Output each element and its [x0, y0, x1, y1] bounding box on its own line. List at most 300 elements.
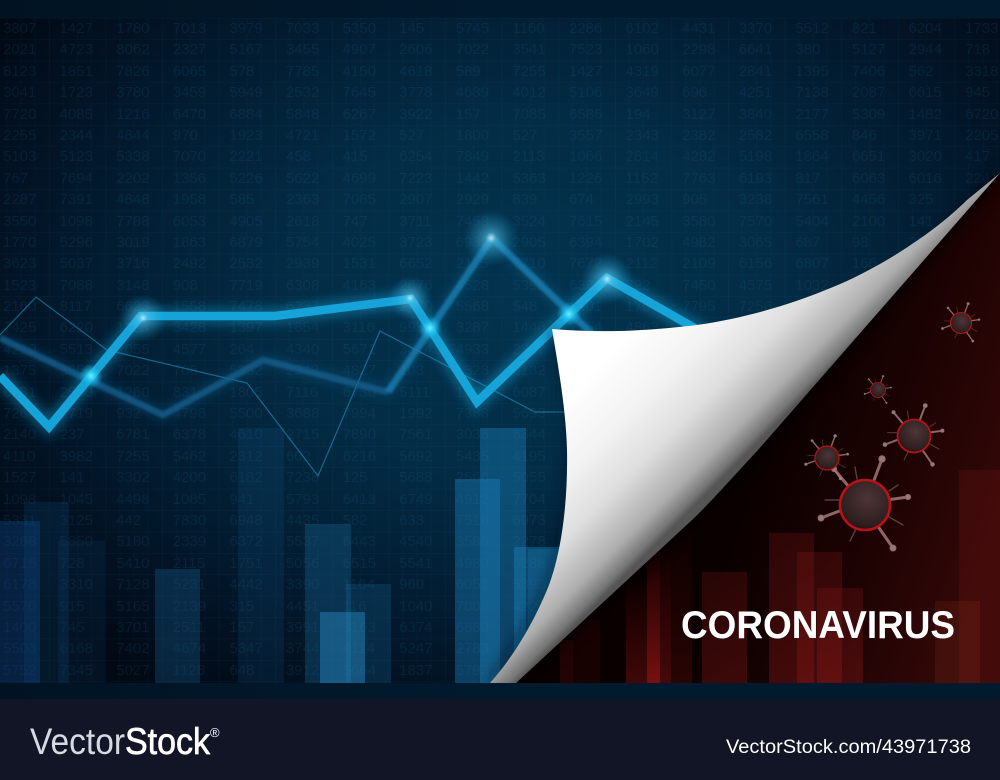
faint table of numbers: 5693 [512, 405, 546, 422]
faint table of numbers: 6879 [229, 234, 263, 251]
faint table of numbers: 3711 [399, 213, 431, 230]
faint table of numbers: 1205 [456, 384, 489, 401]
faint table of numbers: 1837 [399, 662, 433, 679]
faint table of numbers: 1864 [795, 148, 829, 165]
faint table of numbers: 4540 [399, 533, 433, 550]
faint table of numbers: 1531 [343, 255, 376, 272]
faint table of numbers: 722 [626, 277, 651, 294]
faint table of numbers: 2719 [60, 405, 93, 422]
faint table of numbers: 5350 [343, 20, 376, 37]
faint table of numbers: 2286 [569, 20, 602, 37]
faint table of numbers: 2115 [456, 255, 488, 272]
faint table of numbers: 6443 [343, 533, 376, 550]
faint table of numbers: 4689 [456, 84, 489, 101]
faint table of numbers: 6204 [908, 20, 942, 37]
faint table of numbers: 582 [343, 512, 368, 529]
faint table of numbers: 3302 [116, 469, 150, 486]
faint table of numbers: 6308 [286, 277, 319, 294]
faint table of numbers: 1085 [173, 491, 206, 508]
faint table of numbers: 5055 [512, 469, 546, 486]
faint table of numbers: 6372 [229, 533, 263, 550]
faint table of numbers: 5850 [60, 533, 93, 550]
faint table of numbers: 2993 [626, 191, 659, 208]
faint table of numbers: 5562 [965, 213, 998, 230]
faint table of numbers: 3238 [739, 191, 772, 208]
faint table of numbers: 2278 [512, 533, 546, 550]
faint table of numbers: 7425 [3, 319, 36, 336]
faint table of numbers: 6615 [908, 84, 942, 101]
faint table of numbers: 7402 [116, 640, 150, 657]
faint table of numbers: 5332 [229, 362, 263, 379]
faint table of numbers: 2715 [286, 426, 319, 443]
faint table of numbers: 2344 [60, 127, 93, 144]
faint table of numbers: 3163 [343, 619, 376, 636]
faint table of numbers: 7785 [286, 63, 319, 80]
faint table of numbers: 6641 [739, 41, 772, 58]
faint table of numbers: 5226 [229, 170, 263, 187]
faint table of numbers: 3557 [569, 127, 602, 144]
faint table of numbers: 7849 [456, 148, 489, 165]
faint table of numbers: 821 [852, 20, 877, 37]
faint table of numbers: 941 [229, 491, 254, 508]
faint table of numbers: 1751 [229, 555, 263, 572]
faint table of numbers: 1032 [795, 277, 829, 294]
faint table of numbers: 7795 [682, 298, 716, 315]
faint table of numbers: 3716 [116, 255, 150, 272]
faint table of numbers: 7388 [456, 405, 489, 422]
faint table of numbers: 1958 [173, 191, 206, 208]
faint table of numbers: 6220 [60, 319, 93, 336]
faint table of numbers: 1066 [569, 148, 602, 165]
faint table of numbers: 6087 [512, 384, 546, 401]
faint table of numbers: 417 [965, 148, 990, 165]
faint table of numbers: 170 [626, 298, 651, 315]
main glowing line [0, 278, 705, 427]
faint table of numbers: 5671 [343, 341, 376, 358]
faint table of numbers: 3991 [286, 619, 319, 636]
faint table of numbers: 6053 [173, 213, 206, 230]
faint table of numbers: 915 [60, 598, 85, 615]
faint table of numbers: 2307 [512, 341, 546, 358]
faint table of numbers: 2204 [908, 234, 942, 251]
faint table of numbers: 1733 [965, 20, 998, 37]
faint table of numbers: 2177 [795, 106, 829, 123]
faint table of numbers: 4435 [286, 512, 319, 529]
faint table of numbers: 5106 [569, 84, 602, 101]
faint table of numbers: 103 [399, 362, 424, 379]
faint table of numbers: 4528 [456, 277, 489, 294]
faint table of numbers: 6932 [456, 234, 489, 251]
faint table of numbers: 3903 [512, 640, 546, 657]
faint table of numbers: 6948 [229, 512, 263, 529]
faint table of numbers: 3116 [343, 319, 375, 336]
faint table of numbers: 3840 [739, 106, 772, 123]
icon: large virus [818, 456, 911, 551]
faint table of numbers: 7345 [60, 662, 93, 679]
faint table of numbers: 5462 [173, 448, 206, 465]
faint table of numbers: 2511 [173, 619, 205, 636]
faint table of numbers: 1863 [173, 234, 206, 251]
faint table of numbers: 1427 [60, 20, 93, 37]
faint table of numbers: 4210 [3, 341, 36, 358]
faint table of numbers: 7116 [286, 384, 318, 401]
faint table of numbers: 945 [965, 84, 990, 101]
faint table of numbers: 3912 [286, 662, 319, 679]
faint table of numbers: 4905 [229, 213, 263, 230]
faint table of numbers: 1201 [569, 298, 602, 315]
faint table of numbers: 5435 [456, 448, 489, 465]
faint table of numbers: 1923 [229, 127, 263, 144]
faint table of numbers: 1723 [60, 84, 93, 101]
title: coronavirus: CORONAVIRUS [681, 604, 955, 647]
faint table of numbers: 2532 [229, 255, 263, 272]
faint table of numbers: 6102 [626, 20, 659, 37]
faint table of numbers: 2298 [682, 41, 716, 58]
faint table of numbers: 3586 [456, 533, 489, 550]
faint table of numbers: 4912 [456, 491, 489, 508]
faint table of numbers: 8062 [116, 41, 150, 58]
faint table of numbers: 2112 [626, 255, 658, 272]
faint table of numbers: 831 [173, 384, 198, 401]
faint table of numbers: 98 [852, 234, 869, 251]
faint table of numbers: 7085 [343, 191, 376, 208]
faint table of numbers: 1098 [3, 491, 36, 508]
faint table of numbers: 458 [286, 148, 311, 165]
faint table of numbers: 2339 [173, 533, 206, 550]
faint table of numbers: 5347 [229, 640, 263, 657]
faint table of numbers: 1123 [116, 319, 148, 336]
faint table of numbers: 5512 [795, 20, 829, 37]
faint table of numbers: 706 [173, 362, 198, 379]
faint table of numbers: 3455 [286, 41, 319, 58]
faint table of numbers: 3268 [3, 533, 36, 550]
faint table of numbers: 3524 [512, 213, 546, 230]
faint table of numbers: 6063 [852, 170, 885, 187]
faint table of numbers: 8117 [60, 298, 92, 315]
faint table of numbers: 5247 [399, 640, 433, 657]
faint table of numbers: 6880 [456, 619, 489, 636]
faint table of numbers: 2841 [739, 63, 772, 80]
faint table of numbers: 145 [399, 20, 424, 37]
faint table of numbers: 4610 [229, 426, 263, 443]
faint table of numbers: 2145 [626, 213, 659, 230]
faint table of numbers: 1395 [795, 63, 829, 80]
faint table of numbers: 4618 [399, 63, 433, 80]
faint table of numbers: 4721 [286, 127, 319, 144]
faint table of numbers: 4674 [173, 640, 206, 657]
faint table of numbers: 2343 [626, 127, 659, 144]
faint table of numbers: 7009 [456, 598, 489, 615]
faint table of numbers: 4980 [456, 555, 489, 572]
faint table of numbers: 7570 [739, 213, 772, 230]
faint table of numbers: 6374 [399, 619, 433, 636]
faint table of numbers: 4319 [626, 63, 659, 80]
faint table of numbers: 3814 [399, 341, 433, 358]
faint table of numbers: 3701 [116, 619, 150, 636]
faint table of numbers: 1128 [173, 662, 205, 679]
faint table of numbers: 1045 [60, 491, 93, 508]
faint table of numbers: 7033 [286, 20, 319, 37]
faint table of numbers: 2087 [852, 84, 885, 101]
faint table of numbers: 4012 [512, 84, 546, 101]
faint table of numbers: 7710 [512, 255, 546, 272]
faint table of numbers: 995 [399, 319, 424, 336]
faint table of numbers: 2382 [682, 127, 716, 144]
faint table of numbers: 1400 [3, 619, 36, 636]
faint table of numbers: 1216 [116, 106, 150, 123]
faint table of numbers: 1160 [512, 20, 545, 37]
faint table of numbers: 6394 [569, 234, 602, 251]
faint table of numbers: 4251 [739, 84, 772, 101]
faint table of numbers: 6288 [512, 555, 546, 572]
panel: red coronavirus section [516, 173, 1000, 683]
faint table of numbers: 1558 [173, 298, 206, 315]
faint table of numbers: 687 [795, 234, 820, 251]
faint table of numbers: 602 [286, 448, 311, 465]
faint table of numbers: 325 [908, 191, 934, 208]
red bar chart [560, 470, 1000, 683]
faint table of numbers: 6168 [60, 640, 93, 657]
faint table of numbers: 166 [852, 255, 877, 272]
faint table of numbers: 3688 [286, 405, 319, 422]
faint table of numbers: 5231 [173, 576, 206, 593]
image id caption: VectorStock.com/43971738 [726, 737, 971, 758]
faint table of numbers: 6178 [3, 576, 36, 593]
faint table of numbers: 7264 [3, 405, 36, 422]
faint table of numbers: 2241 [965, 170, 998, 187]
faint table of numbers: 6267 [343, 106, 376, 123]
faint table of numbers: 5393 [512, 576, 546, 593]
blue bar chart [0, 428, 574, 683]
faint table of numbers: 6081 [3, 384, 36, 401]
faint table of numbers: 3041 [3, 84, 36, 101]
faint table of numbers: 1226 [569, 170, 602, 187]
faint table of numbers: 4699 [343, 170, 376, 187]
faint table of numbers: 6237 [286, 298, 319, 315]
faint table of numbers: 4577 [173, 341, 206, 358]
faint table of numbers: 846 [852, 127, 877, 144]
faint table of numbers: 2109 [682, 255, 716, 272]
faint table of numbers: 2532 [286, 84, 319, 101]
faint table of numbers: 5331 [3, 512, 36, 529]
faint table of numbers: 5688 [399, 469, 433, 486]
faint table of numbers: 5167 [229, 41, 263, 58]
icon: small virus left [804, 434, 849, 480]
faint table of numbers: 7719 [229, 277, 263, 294]
faint table of numbers: 5570 [3, 598, 36, 615]
faint table of numbers: 3922 [399, 106, 433, 123]
faint table of numbers: 7022 [116, 362, 150, 379]
faint table of numbers: 2618 [286, 213, 319, 230]
faint table of numbers: 2470 [399, 298, 433, 315]
faint table of numbers: 1040 [399, 598, 433, 615]
faint table of numbers: 4456 [852, 191, 885, 208]
faint table of numbers: 7478 [229, 298, 263, 315]
faint table of numbers: 1482 [908, 106, 942, 123]
faint table of numbers: 2606 [399, 41, 433, 58]
faint table of numbers: 585 [229, 191, 254, 208]
faint table of numbers: 4451 [286, 598, 319, 615]
faint table of numbers: 7022 [456, 41, 489, 58]
faint table of numbers: 589 [456, 63, 481, 80]
faint table of numbers: 2205 [965, 127, 998, 144]
faint table of numbers: 1520 [512, 619, 546, 636]
faint table of numbers: 194 [626, 106, 651, 123]
faint table of numbers: 6216 [343, 448, 376, 465]
faint table of numbers: 5165 [116, 598, 150, 615]
faint table of numbers: 7013 [173, 20, 206, 37]
faint table of numbers: 5296 [60, 234, 93, 251]
faint table of numbers: 4848 [116, 191, 150, 208]
logo: VectorStock: Stock [125, 721, 210, 762]
faint table of numbers: 3428 [173, 319, 206, 336]
faint table of numbers: 7523 [569, 41, 602, 58]
secondary glowing line [0, 238, 620, 415]
faint table of numbers: 2814 [626, 148, 659, 165]
faint table of numbers: 5309 [852, 106, 885, 123]
faint table of numbers: 1523 [3, 277, 36, 294]
faint table of numbers: 2221 [229, 148, 263, 165]
faint table of numbers: 6182 [229, 469, 263, 486]
faint table of numbers: 1992 [399, 405, 433, 422]
faint table of numbers: 839 [512, 191, 537, 208]
faint table of numbers: 4025 [343, 234, 376, 251]
curled white page [490, 173, 1000, 683]
faint table of numbers: 5537 [286, 533, 319, 550]
faint table of numbers: 6077 [682, 63, 716, 80]
faint table of numbers: 8123 [3, 63, 36, 80]
faint table of numbers: 3744 [286, 640, 319, 657]
faint table of numbers: 4282 [682, 148, 716, 165]
icon: tiny virus [864, 375, 892, 404]
faint table of numbers: 1702 [626, 234, 659, 251]
faint table of numbers: 3649 [626, 84, 659, 101]
faint table of numbers: 6730 [343, 384, 376, 401]
faint table of numbers: 2115 [173, 555, 205, 572]
faint table of numbers: 6884 [229, 106, 263, 123]
logo: VectorStock: Vector [30, 721, 125, 762]
faint table of numbers: 4163 [343, 277, 376, 294]
faint table of numbers: 6651 [852, 148, 885, 165]
faint table of numbers: 5793 [456, 662, 489, 679]
faint table of numbers: 2566 [456, 469, 489, 486]
faint table of numbers: 7994 [343, 405, 376, 422]
faint table of numbers: 6254 [399, 148, 433, 165]
icon: medium virus [883, 404, 944, 466]
faint table of numbers: 3287 [456, 319, 489, 336]
faint table of numbers: 728 [60, 555, 85, 572]
faint table of numbers: 1427 [569, 63, 602, 80]
faint table of numbers: 1572 [343, 127, 376, 144]
faint table of numbers: 1800 [456, 127, 489, 144]
faint table of numbers: 6344 [512, 426, 546, 443]
faint table of numbers: 960 [399, 576, 424, 593]
faint table of numbers: 3459 [173, 84, 206, 101]
faint table of numbers: 2312 [229, 448, 263, 465]
faint table of numbers: 4863 [626, 319, 659, 336]
faint table of numbers: 5848 [286, 106, 319, 123]
faint table of numbers: 527 [512, 127, 537, 144]
faint table of numbers: 2287 [3, 191, 36, 208]
faint table of numbers: 696 [682, 84, 707, 101]
faint table of numbers: 1060 [626, 41, 659, 58]
faint table of numbers: 7826 [116, 63, 150, 80]
faint table of numbers: 3036 [456, 426, 489, 443]
curl shadow on blue area [490, 329, 570, 683]
faint table of numbers: 5745 [456, 20, 489, 37]
faint table of numbers: 932 [116, 405, 141, 422]
faint table of numbers: 6132 [512, 362, 546, 379]
faint table of numbers: 1442 [456, 170, 489, 187]
faint table of numbers: 1527 [3, 469, 36, 486]
faint table of numbers: 4827 [343, 362, 376, 379]
faint table of numbers: 5404 [795, 213, 829, 230]
faint table of numbers: 2160 [3, 298, 36, 315]
faint table of numbers: 905 [682, 191, 707, 208]
faint table of numbers: 2560 [60, 384, 93, 401]
faint table of numbers: 7406 [852, 63, 885, 80]
faint table of numbers: 7890 [343, 426, 376, 443]
faint table of numbers: 5111 [399, 384, 430, 401]
faint table of numbers: 3982 [60, 448, 93, 465]
faint table of numbers: 7763 [682, 170, 716, 187]
faint table of numbers: 674 [569, 191, 594, 208]
faint table of numbers: 3623 [3, 255, 36, 272]
faint table of numbers: 7561 [795, 191, 829, 208]
faint table of numbers: 7070 [173, 148, 206, 165]
faint table of numbers: 2905 [512, 234, 546, 251]
faint table of numbers: 7085 [512, 106, 546, 123]
faint table of numbers: 4085 [60, 106, 93, 123]
faint table of numbers: 2363 [286, 191, 319, 208]
logo: VectorStock: ® [210, 725, 220, 740]
faint table of numbers: 442 [116, 512, 141, 529]
faint table of numbers: 6749 [399, 491, 433, 508]
faint table of numbers: 2140 [3, 426, 36, 443]
faint table of numbers: 3780 [116, 84, 150, 101]
faint table of numbers: 2202 [116, 170, 150, 187]
faint table of numbers: 5568 [456, 298, 489, 315]
faint table of numbers: 6515 [343, 555, 376, 572]
faint table of numbers: 157 [456, 106, 481, 123]
faint table of numbers: 3019 [116, 234, 150, 251]
logo: VectorStock [30, 721, 220, 762]
faint table of numbers: 2055 [116, 341, 150, 358]
faint table of numbers: 5541 [399, 555, 433, 572]
faint table of numbers: 745 [60, 619, 85, 636]
faint table of numbers: 7256 [739, 298, 772, 315]
faint table of numbers: 3952 [60, 362, 93, 379]
faint table of numbers: 3390 [286, 576, 319, 593]
faint table of numbers: 3310 [60, 576, 93, 593]
faint table of numbers: 3778 [399, 84, 433, 101]
faint table of numbers: 3127 [682, 106, 716, 123]
faint table of numbers: 2113 [512, 148, 545, 165]
footer bar [0, 699, 1000, 780]
faint table of numbers: 4442 [229, 576, 263, 593]
faint table of numbers: 1375 [3, 362, 36, 379]
faint table of numbers: 5513 [60, 341, 93, 358]
faint table of numbers: 3541 [512, 41, 546, 58]
faint table of numbers: 2783 [456, 640, 489, 657]
faint table of numbers: 908 [173, 277, 198, 294]
faint table of numbers: 5622 [286, 170, 319, 187]
faint table of numbers: 2139 [173, 598, 206, 615]
faint table of numbers: 4498 [116, 491, 150, 508]
faint table of numbers: 1260 [116, 384, 150, 401]
faint table of numbers: 125 [343, 469, 368, 486]
faint table of numbers: 7516 [456, 512, 489, 529]
